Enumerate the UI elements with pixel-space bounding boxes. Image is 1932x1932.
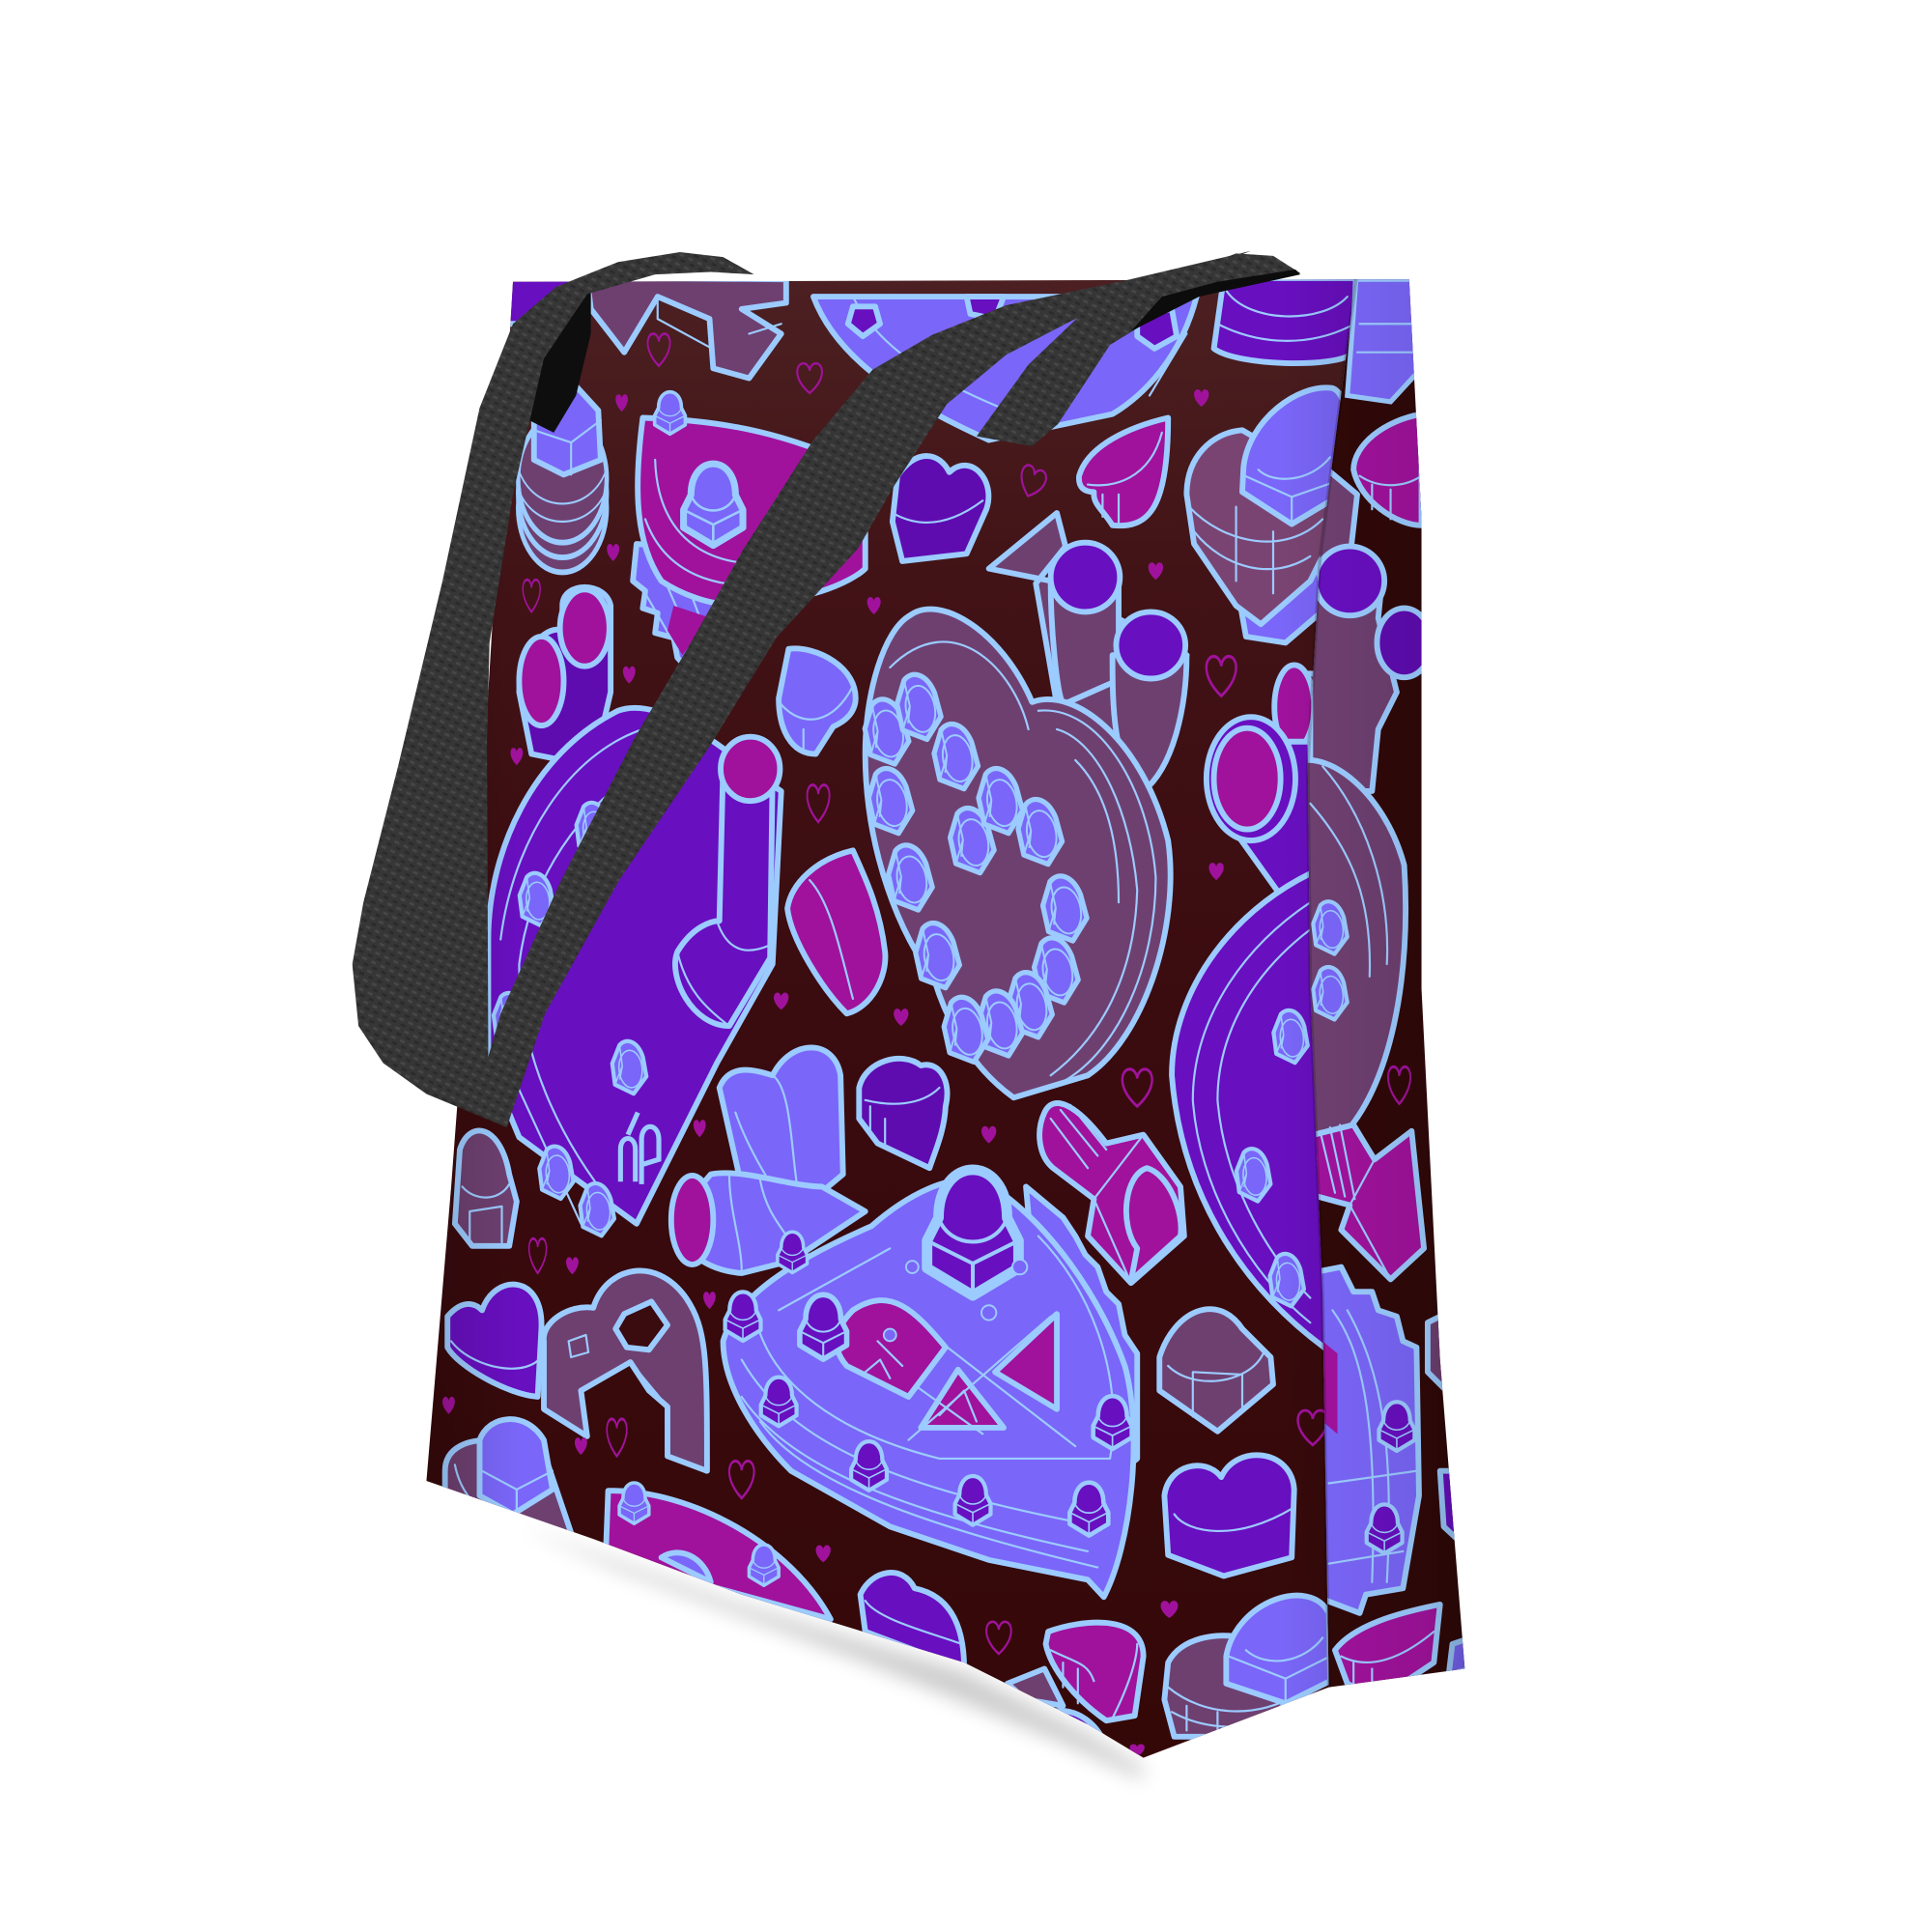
- pipe ellipse at fold: [1271, 663, 1314, 780]
- strap shadow on right end: [1131, 270, 1300, 331]
- purple heart: [893, 456, 988, 561]
- right strap hanging end: [977, 253, 1300, 446]
- outline hearts: [523, 333, 1327, 1654]
- mauve nut right: [1159, 1309, 1273, 1432]
- gusset pipes: [1310, 547, 1432, 791]
- gusset big periwinkle piece: [1310, 1267, 1419, 1613]
- gusset stack end: [1298, 445, 1357, 642]
- magenta bolt: [1039, 1103, 1184, 1283]
- front panel base fabric: [426, 279, 1356, 1758]
- magenta heart: [1079, 418, 1168, 526]
- stacked nut bottom right: [1164, 1596, 1330, 1737]
- stacked nut upper-left: [518, 381, 607, 572]
- top lobe pipe: [671, 1047, 866, 1273]
- top-left purple fragment: [510, 282, 569, 327]
- mauve heart with pipes: [861, 513, 1186, 1097]
- nut mauve lower-left: [455, 1130, 517, 1246]
- magenta heart center: [787, 850, 885, 1013]
- main plate: [724, 1179, 1134, 1597]
- strap: main loop: [353, 251, 1251, 1127]
- gusset band at top: [1348, 279, 1419, 402]
- gusset bolt: [1304, 1124, 1424, 1279]
- gusset magenta heart bottom: [1335, 1605, 1440, 1699]
- purple heart small: [859, 1059, 948, 1168]
- bag drop shadow: [519, 1526, 1144, 1780]
- bolts on purple heart: [491, 800, 649, 1238]
- purple heart lower left: [447, 1285, 542, 1397]
- heart body: [866, 610, 1171, 1097]
- top-right purple heart: [1214, 278, 1356, 363]
- gusset mauve heart: [1286, 760, 1406, 1193]
- pipes: [989, 513, 1186, 797]
- bottom corner fragments: [1008, 1668, 1106, 1749]
- panel: gusset pattern: [1286, 279, 1471, 1699]
- purple heart bottom: [861, 1573, 964, 1668]
- purple heart lower right: [1164, 1455, 1294, 1576]
- small filled hearts: [442, 389, 1224, 1756]
- magenta windows: [837, 1300, 1057, 1428]
- right pipe and purple heart: [1169, 663, 1323, 1350]
- magenta heart half with nuts and teeth: [633, 392, 866, 673]
- wrench mauve: [544, 1270, 707, 1471]
- teeth: [1026, 1186, 1137, 1484]
- stacked nut bottom left: [445, 1419, 571, 1533]
- magenta gear bottom: [606, 1483, 831, 1619]
- logo mark: [620, 1113, 659, 1184]
- plate rivets: [884, 1260, 1027, 1341]
- stacked nut right: [1186, 387, 1350, 642]
- bag fold line: [1308, 279, 1356, 1688]
- gusset lines top: [1357, 324, 1415, 353]
- elbow pipe: [675, 737, 780, 1026]
- periwinkle heart: [779, 648, 856, 754]
- fabric shading front: [426, 278, 1356, 1761]
- inner black strap end left: [529, 292, 591, 433]
- tote bag body: [426, 278, 1471, 1761]
- magenta heart bottom: [1046, 1623, 1144, 1720]
- top large periwinkle fragment: [813, 297, 1197, 440]
- panel: front pattern: [426, 278, 1411, 1761]
- gusset outline heart: [1388, 1066, 1410, 1104]
- struts: [908, 1317, 1075, 1446]
- gusset base fabric: [1308, 279, 1464, 1688]
- ring of nuts: [861, 671, 1091, 1066]
- purple nuts on plate: [725, 1170, 1132, 1536]
- big periwinkle heart: [671, 1047, 1137, 1597]
- wrench top fragment: [587, 278, 786, 379]
- gusset magenta heart: [1353, 414, 1422, 526]
- strap: back strap: [529, 253, 1300, 446]
- gusset edge fragments: [1428, 1310, 1471, 1675]
- purple heart with pipes: [488, 587, 781, 1237]
- gusset shading: [1298, 279, 1471, 1693]
